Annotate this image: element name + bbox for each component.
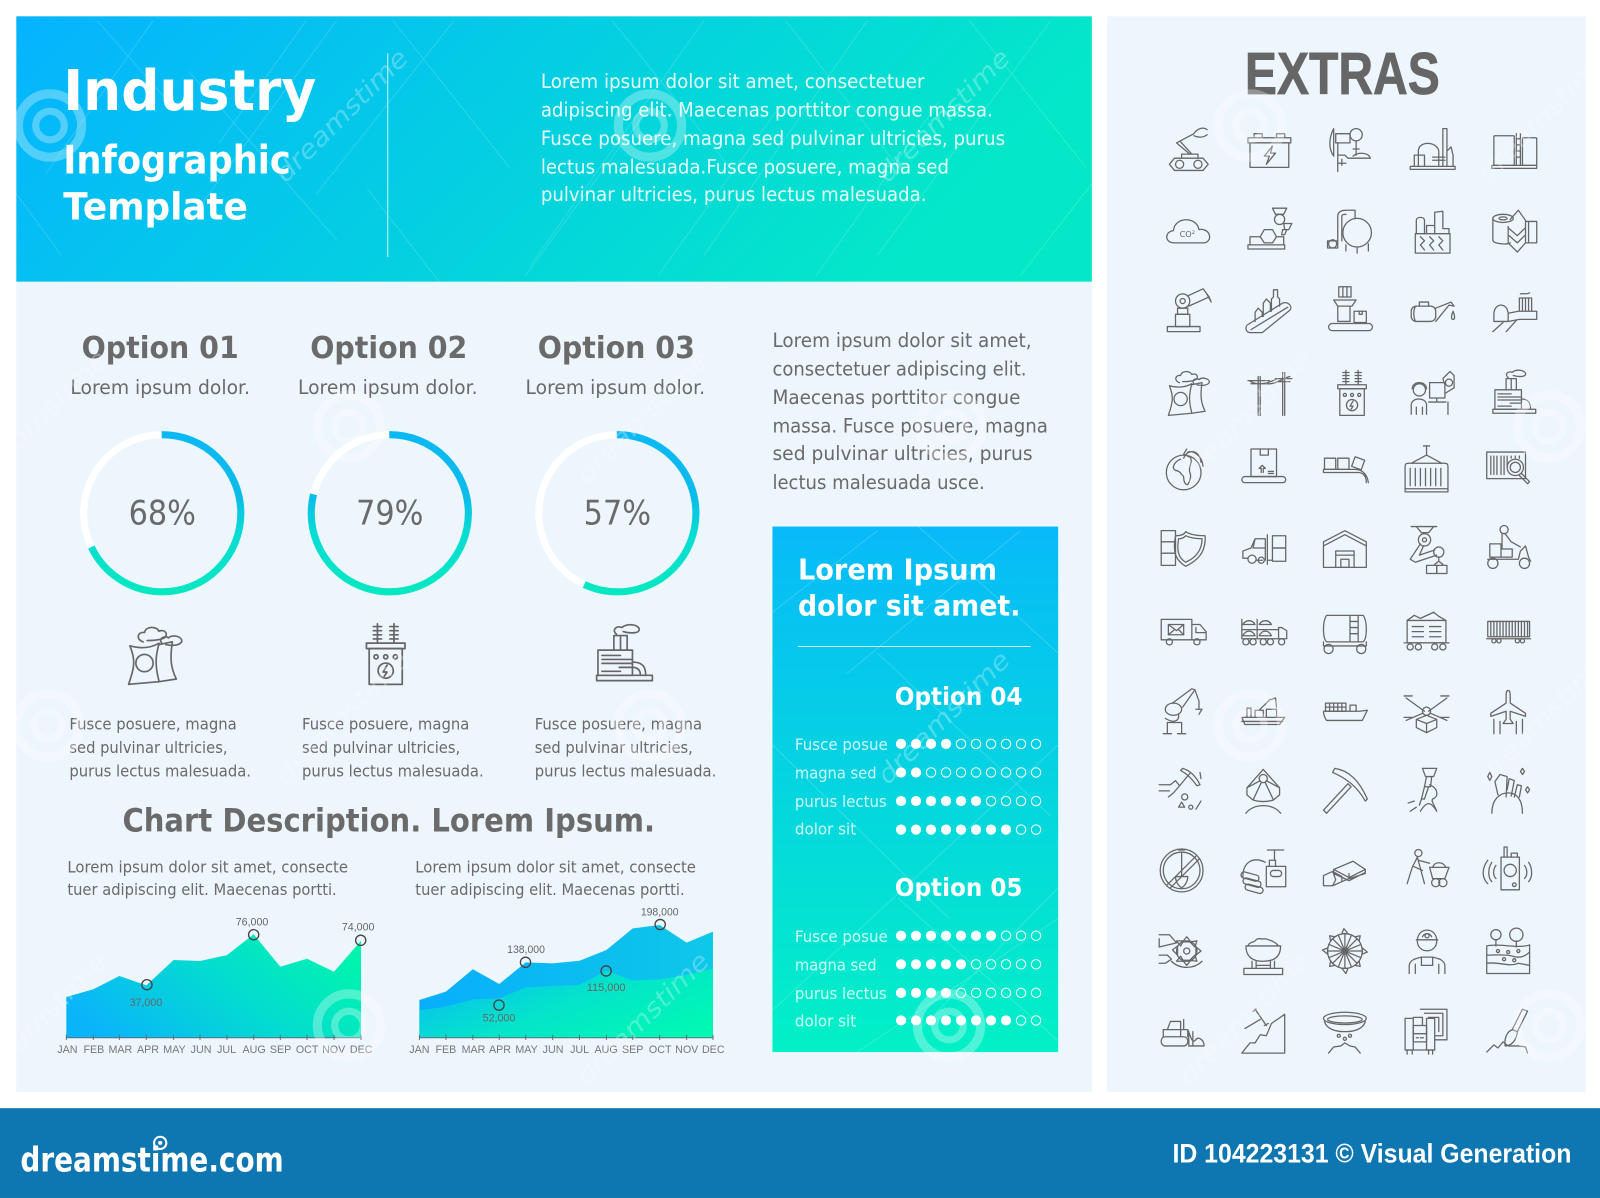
icon: factory bbox=[597, 625, 652, 681]
area chart 1: MAR bbox=[109, 1044, 133, 1056]
area chart 2: OCT bbox=[649, 1044, 672, 1056]
chart 2 caption: tuer adipiscing elit. Maecenas portti. bbox=[415, 880, 685, 899]
icon: robot arm bbox=[1167, 289, 1211, 332]
right text block: Lorem ipsum dolor sit amet, bbox=[772, 329, 1032, 352]
header paragraph: pulvinar ultricies, purus lectus malesuada. bbox=[541, 183, 927, 206]
icon: cargo ship bbox=[1242, 698, 1285, 725]
watermark: dreamstime text and spirals: dreamstime bbox=[1471, 43, 1600, 189]
option 04 ratings: Option 04 bbox=[895, 682, 1022, 711]
area chart 1: FEB bbox=[83, 1044, 104, 1056]
area chart 2: 52,000 bbox=[483, 1012, 515, 1024]
area chart 1: APR bbox=[137, 1044, 159, 1056]
area chart 1: JUL bbox=[217, 1044, 236, 1056]
option 03 column heading bbox=[526, 331, 705, 399]
icon: cliff with pick bbox=[1242, 1009, 1285, 1053]
icon: crusher bbox=[1248, 208, 1292, 249]
icon: container ship bbox=[1323, 703, 1367, 720]
icon: no digging sign bbox=[1160, 849, 1203, 892]
donut chart 79% bbox=[311, 435, 468, 592]
icon: power poles bbox=[1248, 372, 1292, 415]
area chart 1: JAN bbox=[57, 1044, 77, 1056]
option 02 column heading: Option 02 bbox=[310, 331, 467, 366]
area chart 1: MAY bbox=[163, 1044, 186, 1056]
donut chart 57%: 57% bbox=[584, 494, 651, 533]
icon: gold bars bbox=[1323, 861, 1365, 886]
icon: mail truck bbox=[1161, 619, 1206, 645]
option 03 column heading: Lorem ipsum dolor. bbox=[526, 376, 705, 399]
title: Industry bbox=[63, 59, 316, 124]
area chart 2: AUG bbox=[595, 1044, 618, 1056]
title: Template bbox=[63, 184, 248, 228]
description option 02: sed pulvinar ultricies, bbox=[302, 738, 460, 757]
panel: ratings card bbox=[772, 527, 1058, 1052]
area chart 2: DEC bbox=[702, 1044, 725, 1056]
icon: shovel in soil bbox=[1487, 1009, 1528, 1053]
right text block bbox=[772, 329, 1048, 494]
icon: storage tanks bbox=[1492, 134, 1537, 168]
donut chart 57% bbox=[539, 435, 696, 592]
icon: shipping container bbox=[1405, 446, 1448, 492]
description option 02: Fusce posuere, magna bbox=[302, 715, 469, 734]
header banner bbox=[16, 16, 1092, 282]
area chart 2: 138,000 bbox=[507, 944, 545, 956]
icon: battery bbox=[1248, 134, 1291, 167]
icon: port crane bbox=[1163, 689, 1202, 734]
icon: oil can bbox=[1411, 302, 1455, 321]
watermark: dreamstime text and spirals: dreamstime bbox=[871, 43, 1017, 189]
option 04 ratings: magna sed bbox=[795, 764, 877, 783]
option 04 ratings: purus lectus bbox=[795, 792, 887, 811]
description option 01: purus lectus malesuada. bbox=[69, 762, 251, 781]
icon: CO2 cloud bbox=[1167, 220, 1210, 243]
area chart 2: MAR bbox=[462, 1044, 486, 1056]
chart section heading: Chart Description. Lorem Ipsum. bbox=[122, 804, 655, 840]
option 05 ratings: purus lectus bbox=[795, 984, 887, 1003]
area chart 1: 37,000 bbox=[130, 997, 162, 1009]
icon: transformer small bbox=[1338, 370, 1366, 415]
option 05 ratings: Option 05 bbox=[895, 873, 1022, 902]
description option 01: Fusce posuere, magna bbox=[69, 715, 237, 734]
area chart 2: NOV bbox=[675, 1044, 699, 1056]
footer bar bbox=[0, 1108, 1600, 1198]
chart 2 caption: Lorem ipsum dolor sit amet, consecte bbox=[415, 857, 696, 876]
icon: boiler tank bbox=[1328, 210, 1371, 253]
watermark: dreamstime text and spirals: dreamstime bbox=[1173, 946, 1318, 1092]
icon: jackhammer bbox=[1408, 768, 1437, 811]
icon: shield and boxes bbox=[1161, 531, 1205, 566]
right text block: massa. Fusce posuere, magna bbox=[772, 415, 1048, 438]
option 01 column heading bbox=[70, 331, 250, 399]
area chart 2: APR bbox=[489, 1044, 511, 1056]
icon: crystals bbox=[1488, 768, 1530, 813]
watermark: dreamstime text and spirals: dreamstime bbox=[871, 645, 1017, 791]
description option 02 bbox=[302, 715, 484, 781]
icon: car carrier bbox=[1242, 619, 1287, 645]
icon: engineer at screen bbox=[1411, 371, 1454, 414]
icon: globe bbox=[1166, 449, 1203, 490]
area chart 2: JUL bbox=[570, 1044, 589, 1056]
option 05 ratings: magna sed bbox=[795, 955, 877, 974]
icon: pickaxe bbox=[1323, 768, 1367, 813]
icon: press machine bbox=[1330, 129, 1370, 171]
area chart 1: SEP bbox=[270, 1044, 291, 1056]
icon: factory with heat bbox=[1415, 211, 1450, 253]
icon: warehouse bbox=[1323, 531, 1366, 567]
option 05 ratings bbox=[795, 873, 1041, 1031]
icon: conveyor bottles bbox=[1246, 290, 1291, 333]
icon: airplane bbox=[1491, 690, 1526, 734]
panel: main background bbox=[16, 16, 1092, 1092]
description option 03: Fusce posuere, magna bbox=[535, 715, 702, 734]
option 01 column heading: Option 01 bbox=[82, 331, 239, 366]
card heading: Lorem Ipsum bbox=[798, 553, 997, 587]
header paragraph bbox=[541, 70, 1005, 206]
footer logo: dreamstime.com bbox=[20, 1140, 284, 1179]
icon: miner bbox=[1409, 930, 1445, 973]
donut chart 79%: 79% bbox=[356, 494, 423, 533]
chart 1 caption: Lorem ipsum dolor sit amet, consecte bbox=[67, 857, 348, 876]
icon: pallets bbox=[1323, 457, 1368, 483]
icon: grab bucket bbox=[1246, 769, 1281, 813]
option 05 ratings: Fusce posue bbox=[795, 927, 888, 946]
icon: mining machine bbox=[1405, 1009, 1447, 1054]
icon: roll and shield bbox=[1493, 210, 1537, 252]
right text block: lectus malesuada usce. bbox=[772, 471, 985, 494]
area chart 1: DEC bbox=[350, 1044, 373, 1056]
watermark: dreamstime text and spirals: dreamstime bbox=[1471, 645, 1600, 791]
icon: mill wheel bbox=[1322, 929, 1367, 973]
icon: refinery bbox=[1410, 129, 1455, 169]
icon: tank wagon bbox=[1323, 615, 1366, 654]
header paragraph: Lorem ipsum dolor sit amet, consectetuer bbox=[541, 70, 925, 93]
area chart 2: FEB bbox=[436, 1044, 456, 1056]
area chart 1: JUN bbox=[191, 1044, 211, 1056]
icon: soil layers bbox=[1487, 928, 1530, 973]
watermark: dreamstime text and spirals: dreamstime bbox=[570, 946, 716, 1092]
icon: coal wagon bbox=[1404, 612, 1449, 650]
option 01 column heading: Lorem ipsum dolor. bbox=[70, 376, 250, 399]
icon: robot on treads bbox=[1169, 128, 1208, 170]
area chart 1 bbox=[57, 917, 375, 1056]
icon: box on conveyor bbox=[1242, 449, 1286, 483]
watermark: dreamstime text and spirals: dreamstime bbox=[269, 645, 415, 791]
icon: delivery drone bbox=[1404, 696, 1449, 733]
description option 03: sed pulvinar ultricies, bbox=[535, 738, 693, 757]
donut chart 68%: 68% bbox=[129, 494, 196, 533]
icon: gold pan bbox=[1323, 1012, 1366, 1053]
panel: extras background bbox=[1107, 16, 1586, 1092]
option 04 ratings bbox=[795, 682, 1041, 839]
right text block: consectetuer adipiscing elit. bbox=[772, 358, 1027, 381]
icon: walkie talkie bbox=[1483, 847, 1532, 890]
header paragraph: Fusce posuere, magna sed pulvinar ultricies, purus bbox=[541, 127, 1005, 150]
icon: container wagon bbox=[1487, 621, 1531, 643]
icon: hand with pick bbox=[1159, 768, 1201, 809]
chart 1 caption: tuer adipiscing elit. Maecenas portti. bbox=[67, 880, 337, 899]
icon: miner with cart bbox=[1407, 850, 1449, 887]
description option 03: purus lectus malesuada. bbox=[535, 762, 716, 781]
title: Infographic bbox=[63, 138, 291, 183]
area chart 2: 198,000 bbox=[641, 906, 679, 918]
icon: ore bowl bbox=[1244, 939, 1283, 975]
footer credit: ID 104223131 © Visual Generation bbox=[1172, 1138, 1571, 1168]
donut chart 68% bbox=[84, 435, 241, 592]
area chart 1: 76,000 bbox=[236, 917, 268, 929]
description option 03 bbox=[535, 715, 716, 781]
area chart 2: JAN bbox=[409, 1044, 430, 1056]
title bbox=[63, 59, 316, 228]
right text block: Maecenas porttitor congue bbox=[772, 386, 1020, 409]
area chart 2: 115,000 bbox=[587, 982, 626, 994]
card heading: dolor sit amet. bbox=[798, 588, 1020, 622]
header paragraph: adipiscing elit. Maecenas porttitor congue massa. bbox=[541, 98, 993, 121]
icon: barcode search bbox=[1487, 452, 1530, 484]
icon: cooling towers bbox=[129, 627, 182, 684]
description option 01: sed pulvinar ultricies, bbox=[69, 738, 228, 757]
option 05 ratings: dolor sit bbox=[795, 1012, 856, 1031]
watermark: dreamstime text and spirals: dreamstime bbox=[269, 43, 415, 189]
area chart 1: NOV bbox=[322, 1044, 346, 1056]
area chart 2: SEP bbox=[622, 1044, 643, 1056]
icon grid: extras bbox=[1159, 128, 1537, 1054]
description option 02: purus lectus malesuada. bbox=[302, 762, 484, 781]
icon: bulldozer bbox=[1161, 1019, 1204, 1046]
watermark: dreamstime text and spirals: dreamstime bbox=[570, 344, 716, 490]
option 04 ratings: dolor sit bbox=[795, 820, 856, 839]
chart 2 caption bbox=[415, 857, 696, 899]
icon: factory small bbox=[1493, 370, 1536, 413]
vertical divider in header bbox=[387, 53, 389, 257]
card heading bbox=[798, 553, 1020, 622]
icon: nuclear towers bbox=[1168, 372, 1209, 415]
option 02 column heading: Lorem ipsum dolor. bbox=[298, 376, 478, 399]
option 04 ratings: Fusce posue bbox=[795, 735, 888, 754]
icon: forklift bbox=[1243, 535, 1286, 564]
area chart 2 bbox=[409, 906, 725, 1056]
icon: dynamite bbox=[1240, 850, 1286, 894]
option 03 column heading: Option 03 bbox=[538, 331, 695, 366]
area chart 2: MAY bbox=[515, 1044, 538, 1056]
right text block: sed pulvinar ultricies, purus bbox=[772, 442, 1033, 465]
icon: CO2 cloud: CO² bbox=[1180, 229, 1195, 239]
icon: filling machine bbox=[1329, 287, 1372, 331]
chart 1 caption bbox=[67, 857, 348, 899]
area chart 1: 74,000 bbox=[342, 922, 375, 934]
header paragraph: lectus malesuada.Fusce posuere, magna sed bbox=[541, 155, 949, 178]
area chart 1: OCT bbox=[296, 1044, 319, 1056]
icon: pipeline plant bbox=[1493, 293, 1537, 332]
icon: bucket wheel excavator bbox=[1159, 935, 1202, 967]
icon: delivery scooter bbox=[1488, 526, 1531, 568]
area chart 1: AUG bbox=[242, 1044, 266, 1056]
watermark: dreamstime text and spirals: dreamstime bbox=[1173, 344, 1318, 490]
extras heading: EXTRAS bbox=[1245, 40, 1440, 107]
icon: transformer bbox=[366, 624, 405, 684]
option 02 column heading bbox=[298, 331, 478, 399]
description option 01 bbox=[69, 715, 251, 781]
icon: robotic arm over boxes bbox=[1410, 527, 1447, 573]
area chart 2: JUN bbox=[543, 1044, 563, 1056]
